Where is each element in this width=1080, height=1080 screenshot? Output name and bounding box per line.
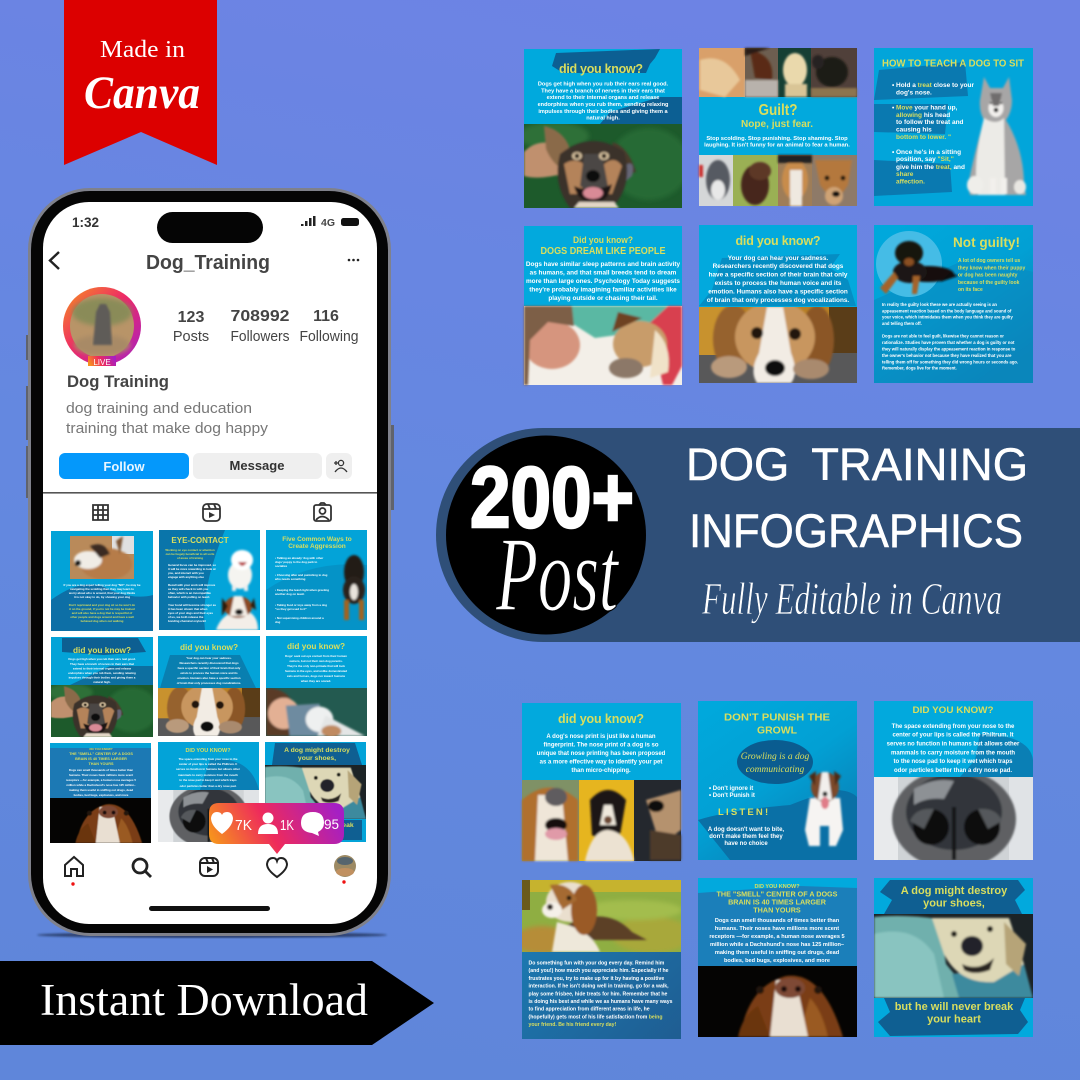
thumbnail: dog in box: and will also have a dog that is respectful of [72, 611, 132, 615]
thumbnail: sad beagle: of brain that only processes dog vocalizations. [177, 681, 241, 685]
body text: play some frisbee, hide treats for him. Remember that he [528, 991, 667, 997]
thumbnail: eye contact: Your bond will become stronger as [168, 603, 216, 607]
notification badge [209, 803, 344, 854]
body text: impulses through their bodies and giving them a [538, 109, 669, 115]
thumbnail: dog nose: DID YOU KNOW? [185, 748, 231, 754]
steps: to follow the treat and [896, 119, 964, 126]
thumbnail: dog ear rub: They have a branch of nerves in their ears that [70, 662, 134, 666]
thumbnail: woman and dog: Dogs' seek out eye contact from their human [285, 654, 347, 658]
thumbnail: eye contact: engage with anything else [168, 575, 204, 579]
callout blob [737, 740, 813, 784]
thumbnail: smell center: Dogs can smell thousands of times better than [69, 768, 133, 772]
thumbnail: sad beagle: emotion. Humans also have a specific section [177, 676, 241, 680]
body text: laughing. It isn't funny for an animal to fear a human. [704, 142, 850, 148]
body text: Do something fun with your dog every day. Remind him [528, 960, 665, 966]
subheading: Nope, just fear. [741, 119, 813, 130]
steps: dog's nose. [896, 89, 932, 96]
body text: In reality the guilty look these we are actually seeing is an [882, 302, 997, 307]
profile stats: 123 [178, 309, 204, 326]
photo: dog looking up [698, 966, 857, 1037]
title: INFOGRAPHICS [689, 504, 1023, 557]
heading: THAN YOURS [753, 906, 801, 914]
thumbnail: woman and dog [266, 636, 367, 737]
body text: to find appreciation from different areas in life, he [528, 1007, 650, 1013]
add friend button [326, 453, 352, 479]
heading: your shoes, [923, 898, 985, 910]
thumbnail: destroy shoes [265, 742, 366, 842]
notification badge: 95 [324, 816, 339, 832]
body text: Remember, dogs live for the moment. [882, 366, 957, 371]
thumbnail: eye contact: bonding chemical oxytocin! [168, 619, 206, 623]
thumbnail: eye contact: it has been shown that when [168, 607, 208, 611]
thumbnail: dog nose: to the nose pad to keep it wet which traps [179, 778, 237, 782]
thumbnail: eye contact: Recall with your work will improve [168, 583, 216, 587]
thumbnail: five common ways: dog [275, 620, 281, 624]
closing text: have no choice [724, 841, 768, 847]
body text [887, 724, 1020, 774]
heading: THE "SMELL" CENTER OF A DOGS [717, 890, 838, 898]
fourth row card: destroy your shoes [874, 878, 1033, 1037]
thumbnail: smell center: humans. Their noses have millions more scent [69, 773, 133, 777]
body text: frustrates you, try to make up for it by having a positive [528, 976, 664, 982]
photo: rottweiler on blue circle [876, 231, 958, 297]
icon: badge heart [211, 812, 233, 834]
body text: million while a Dachshund's nose has 125 million– [710, 942, 844, 948]
body text: bodies, bed bugs, explosives, and more [724, 958, 830, 964]
heading: did you know? [559, 62, 643, 76]
intro text: they know when their puppy [958, 266, 1025, 272]
fourth row card: smell center [698, 878, 857, 1037]
heading: Not guilty! [953, 235, 1020, 250]
profile stats: Posts [173, 329, 209, 345]
thumbnail: destroy shoes: but he will never break [280, 822, 354, 829]
heading: A dog might destroy [901, 885, 1008, 897]
follow button [59, 453, 189, 479]
icon: badge comment [301, 812, 324, 836]
steps: position, say "Sit," [896, 156, 954, 163]
avatar with live ring: LIVE [93, 358, 111, 367]
heading: BRAIN IS 40 TIMES LARGER [728, 898, 827, 906]
body text: and telling them off. [882, 321, 922, 326]
body text: appeasement reaction based on the body language and sound of [882, 308, 1012, 313]
profile stats: 116 [313, 308, 339, 325]
body text: humans. Their noses have millions more scent [715, 926, 839, 932]
heading [724, 712, 830, 736]
body text: as a more effective way to identify your pet [540, 760, 662, 766]
thumbnail: dog ear rub: natural high. [93, 680, 111, 684]
bullets [709, 786, 755, 799]
thumbnail: dog ear rub: endorphins when you rub them, sending relaxing [68, 671, 136, 675]
photo: sad beagle [699, 301, 857, 383]
status bar: 1:32 [72, 215, 99, 230]
thumbnail: dog ear rub [48, 637, 158, 737]
thumbnail: dog in box [51, 531, 153, 631]
photo: boy and dog sleeping [524, 306, 682, 385]
profile header: Dog_Training [146, 252, 270, 274]
body text: to the nose pad to keep it wet which traps [893, 759, 1013, 765]
thumbnail: dog nose: The space extending from your nose to the [178, 757, 238, 761]
body text: They have a branch of nerves in their ears that [541, 88, 665, 94]
second row card: dogs dream like people [524, 226, 682, 385]
body text: of brain that only processes dog vocalizations. [707, 297, 849, 304]
thumbnail: woman and dog: did you know? [287, 641, 345, 651]
thumbnail: five common ways: another dog on leash [275, 592, 304, 596]
thumbnail: eye contact [159, 530, 260, 630]
top row card: how to teach a dog to sit [874, 48, 1033, 206]
body text [537, 734, 666, 774]
ribbon text: Made in: Made in [100, 37, 185, 63]
photo: beagle in grass [514, 880, 692, 954]
body text: Dogs get high when you rub their ears real good. [538, 82, 669, 88]
body text [704, 136, 850, 148]
thumbnail: eye contact: can be hugely beneficial to all sorts [166, 552, 215, 556]
profile stats: Followers [230, 329, 290, 345]
bullets: • Don't ignore it [709, 786, 753, 792]
photos: three dogs [522, 780, 681, 861]
heading: GROWL [757, 724, 798, 736]
closing text: but he will never break [895, 1001, 1014, 1013]
body text: The space extending from your nose to the [892, 724, 1015, 730]
callout blob: communicating [746, 765, 805, 775]
thumbnail: woman and dog: cats and horses, dogs run toward humans [287, 674, 345, 678]
thumbnail: sad beagle: exists to process the human voice and its [180, 671, 238, 675]
thumbnail: five common ways: • Talking an already 'dog with other [275, 556, 324, 560]
home indicator [149, 906, 270, 911]
body text [709, 918, 845, 964]
third row card: philtrum [874, 701, 1033, 869]
body text: Dogs are not able to feel guilt, likewise they cannot reason or [882, 334, 1004, 339]
thumbnail: smell center: making them useful in sniffing out drugs, dead [69, 788, 133, 792]
thumbnail: dog nose: odor particles better than a dry nose pad. [180, 784, 237, 788]
thumbnail: eye contact: it will be more rewarding to look at [168, 567, 216, 571]
heading [540, 235, 666, 257]
callout blob: Growling is a dog [741, 752, 810, 762]
profile header [50, 252, 359, 274]
thumbnail: dog ear rub: did you know? [73, 645, 131, 655]
thumbnail: woman and dog: humans in the eyes, and unlike domesticated [285, 669, 347, 673]
body text [538, 82, 669, 122]
notification badge: 7K [235, 817, 252, 834]
thumbnail: dog in box: worry about who is around, that your dog thinks [68, 591, 136, 595]
thumbnail: smell center: DO YOU KNOW? [89, 747, 113, 751]
intro text: A lot of dog owners tell us [958, 258, 1021, 264]
body text: Dogs can smell thousands of times better than [715, 918, 840, 924]
thumbnail: sad beagle: have a specific section of their brain that only [178, 666, 241, 670]
listen: LISTEN! [718, 807, 770, 818]
steps: bottom to lower. " [896, 134, 951, 141]
thumbnail: smell center: BRAIN IS 40 TIMES LARGER [75, 757, 127, 761]
thumbnail: eye contact: often, which is an incompatible [168, 591, 211, 595]
profile bio [66, 401, 269, 437]
title [686, 439, 1028, 557]
phone frame [26, 188, 394, 936]
profile stats [173, 308, 358, 345]
body text: Dogs have similar sleep patterns and brain activity [526, 261, 681, 268]
phone mockup [26, 188, 394, 938]
phone shadow [37, 932, 387, 938]
thumbnail: eye contact: of areas of training [177, 556, 203, 560]
steps: • [892, 104, 895, 112]
photo strip: top dogs [699, 48, 857, 97]
body text: center of your lips is called the Philtrum. It [892, 733, 1014, 739]
black circle badge [446, 436, 646, 634]
banner [436, 428, 1080, 642]
thumbnail: sad beagle: Researchers recently discovered that dogs [179, 661, 239, 665]
second row card: hear your sadness [699, 225, 857, 383]
body text: as humans, and that small breeds tend to dream [530, 270, 677, 276]
profile name: Dog Training [67, 373, 169, 391]
tab divider [43, 492, 377, 494]
ribbon: Made in Canva [64, 0, 217, 165]
fourth row card: do something fun [514, 880, 692, 1039]
body text: they will naturally display the appeasement reaction in response to [882, 346, 1016, 351]
photo: husky [967, 77, 1026, 195]
body text: they're probably imagining familiar activities like [529, 286, 677, 294]
Instant Download arrow [0, 961, 434, 1045]
body text: telling them off for something they did wrong hours or seconds ago. [882, 359, 1018, 364]
thumbnail: dog in box: it on the ground, if you're not he may be trained [69, 607, 135, 611]
thumbnail: eye contact: General focus can be improved, so [168, 563, 216, 567]
thumbnail: five common ways: • Taking food or toys away from a dog [275, 603, 327, 607]
heading: HOW TO TEACH A DOG TO SIT [882, 58, 1024, 70]
profile stats: 708992 [230, 308, 290, 325]
status bar [72, 212, 359, 243]
thumbnail: dog ear rub: Dogs get high when you rub their ears real good. [68, 657, 136, 661]
follow button: Follow [103, 459, 145, 474]
photo: puppy on pillow [874, 914, 1033, 998]
bottom navigation [65, 855, 356, 886]
body text: exists to process the human voice and its [715, 280, 842, 287]
closing text: A dog doesn't want to bite, [708, 827, 784, 833]
thumbnail: dog nose: center of your lips is called the Philtrum. It [179, 762, 237, 766]
tab icons [93, 503, 331, 521]
thumbnail: dog in box: it is not okay to do, by showing your dog [74, 595, 130, 599]
thumbnail: dog ear rub: impulses through their bodies and giving them a [69, 676, 136, 680]
icon: profile avatar [334, 855, 356, 877]
body text: is doing his best and while we as humans have many ways [528, 999, 673, 1005]
thumbnail: five common ways [266, 530, 367, 630]
thumbnail: eye contact: behavior with pulling on leash [168, 595, 210, 599]
body text: Stop scolding. Stop punishing. Stop shaming. Stop [706, 136, 848, 142]
intro text: on its face [958, 287, 983, 293]
heading: DID YOU KNOW? [754, 884, 800, 890]
thumbnail: sad beagle: did you know? [180, 642, 238, 652]
title: DOG TRAINING [686, 439, 1028, 490]
thumbnail: dog nose: mammals to carry moisture from the mouth [178, 773, 238, 777]
body text: unique that nose printing has been proposed [537, 751, 666, 757]
thumbnail: eye contact: Working on eye contact or attention [165, 548, 215, 552]
body text: odor particles better than a dry nose pad. [894, 768, 1012, 774]
body text: (and you!) how much you appreciate him. Especially if he [528, 968, 669, 974]
thumbnail: destroy shoes: your shoes, [298, 755, 336, 762]
body text [707, 255, 849, 304]
closing text: your heart [927, 1014, 981, 1026]
body text: serves no function in humans but allows other [887, 741, 1020, 747]
heading: DOGS DREAM LIKE PEOPLE [540, 246, 666, 257]
body text: your voice, which intimidates them when you think they are guilty [882, 315, 1013, 320]
body text: than micro-chipping. [571, 768, 631, 774]
steps: Once he's in a sitting [896, 149, 961, 156]
body text: Researchers recently discovered that dogs [713, 263, 844, 270]
thumbnail: woman and dog: They're the only non-primate that will look [287, 664, 345, 668]
message button: Message [230, 458, 284, 473]
body text: emotion. Humans also have a specific section [708, 288, 848, 296]
profile bio: training that make dog happy [66, 421, 269, 437]
body text [526, 261, 681, 302]
message button [193, 453, 322, 479]
thumbnail: five common ways: • Choosing after and punishing to dog [275, 573, 328, 577]
icon: heart [267, 858, 287, 877]
body text: A dog's nose print is just like a human [546, 734, 656, 740]
thumbnail: five common ways: • Not supervising children around a [275, 616, 324, 620]
body text: Your dog can hear your sadness. [728, 255, 828, 262]
heading: Did you know? [573, 235, 633, 245]
body text: making them useful in sniffing out drugs, dead [715, 950, 840, 956]
thumbnail: smell center [50, 743, 151, 843]
icon: home [65, 857, 83, 876]
thumbnail: dog in box: Don't reprimand and your dog sit so he won't do [69, 603, 135, 607]
steps: Hold a treat close to your [896, 82, 974, 89]
avatar with live ring [63, 287, 141, 367]
icon: search [133, 859, 151, 877]
thumbnail: smell center: THAN YOURS [88, 762, 114, 766]
intro text: or dog has been naughty [958, 272, 1018, 278]
photo: dog with hand [519, 122, 689, 208]
200+: 200+ [470, 450, 634, 546]
icon: white dog [228, 550, 253, 591]
body text: (hopefully) gets most of his life satisfaction from being [528, 1014, 662, 1020]
thumbnail: five common ways: • Keeping the leash tight when greeting [275, 588, 329, 592]
third row card: nose print [522, 703, 681, 861]
body text [528, 960, 673, 1028]
thumbnail: smell center: receptors —for example, a human nose averages 5 [66, 778, 136, 782]
thumbnail: destroy shoes: A dog might destroy [284, 747, 350, 754]
ribbon text: Canva: Canva [84, 67, 200, 119]
body text: more than large ones. Psychology Today suggests [526, 278, 680, 285]
body text: extend to their internal organs and release [547, 95, 659, 101]
top row card: did you know ear rub [519, 49, 689, 208]
thumbnail: woman and dog: owners, but not their own dog parents. [289, 659, 343, 663]
thumbnail: five common ways: Create Aggression [288, 543, 346, 550]
icon: black and tan dog [343, 555, 365, 620]
profile bio: dog training and education [66, 401, 252, 417]
thumbnail: sad beagle: Your dog can hear your sadness. [186, 656, 232, 660]
steps: give him the treat, and [896, 164, 965, 171]
photo: jack russell [805, 771, 843, 846]
thumbnail: eye contact: eyes of your dogs and their eyes [168, 611, 213, 615]
body text [882, 302, 1018, 371]
body text: mammals to carry moisture from the mouth [891, 750, 1015, 756]
Post: Post [495, 516, 620, 633]
thumbnail: smell center: million while a Dachshund's nose has 125 million– [66, 783, 136, 787]
third row card: don't punish the growl [698, 701, 857, 860]
photo: nose closeup [874, 769, 1033, 869]
thumbnail: dog ear rub: extend to their internal organs and release [73, 666, 132, 670]
body text: interaction. If he isn't doing well in training, go for a walk, [528, 984, 669, 990]
thumbnail: dog in box: behaved dog when out walking [81, 619, 124, 623]
body text: the owner's behavior not because they have realized that you are [882, 353, 1012, 358]
thumbnail: eye contact: you, and interact with you [168, 571, 204, 575]
heading: DON'T PUNISH THE [724, 712, 830, 724]
thumbnail: dog in box: If you are a dog expert telling your dog "NO", he may be [64, 583, 141, 587]
heading: did you know? [558, 712, 644, 726]
body text: rationalize. Studies have proven that whether a dog is guilty or not [882, 340, 1015, 345]
steps: causing his [896, 126, 932, 134]
profile stats: Following [300, 329, 358, 345]
photo strip: bottom dogs [699, 155, 857, 206]
heading [901, 885, 1008, 910]
heading: Guilt?: Guilt? [758, 102, 798, 119]
status bar: 4G [321, 217, 335, 229]
thumbnail: dog in box: other people and dogs around and have a well [70, 615, 134, 619]
body text: fingerprint. The nose print of a dog is so [543, 742, 659, 748]
top row card: guilt [699, 48, 857, 206]
thumbnail: eye contact: EYE-CONTACT [171, 536, 229, 545]
closing text [895, 1001, 1014, 1026]
heading: did you know? [736, 234, 820, 248]
body text: natural high. [586, 116, 620, 122]
closing text [708, 827, 784, 847]
thumbnail: five common ways: dogs' puppy to the dog park to [275, 560, 318, 564]
thumbnail: dog nose: serves no function in humans but allows other [176, 767, 241, 771]
steps [892, 82, 974, 186]
thumbnail: five common ways: Five Common Ways to [282, 536, 352, 543]
body text: your friend. Be his friend every day! [528, 1022, 616, 1028]
steps: share [896, 171, 914, 178]
body text: endorphins when you rub them, sending relaxing [538, 102, 669, 108]
steps: affection. [896, 178, 925, 186]
thumbnail: woman and dog: when they are scared. [300, 679, 331, 683]
thumbnail: dog in box: navigating the scolding then they may learn to [70, 587, 134, 591]
body text: have a specific section of their brain that only [709, 272, 848, 278]
icon: brown dog [216, 596, 258, 630]
thumbnail: smell center: bodies, bed bugs, explosives, and more [74, 793, 129, 797]
thumbnail: eye contact: as they will check in with you [168, 587, 209, 591]
icon: reels [200, 858, 218, 876]
thumbnail: eye contact: of us, we both release the [168, 615, 204, 619]
second row card: not guilty [874, 225, 1033, 383]
thumbnail: sad beagle [158, 636, 260, 736]
body text: receptors —for example, a human nose averages 5 [709, 934, 845, 940]
steps: • [892, 149, 895, 156]
thumbnail: five common ways: "so they get used to it" [275, 607, 307, 611]
closing text: don't make them feel they [709, 834, 783, 840]
steps: • [892, 82, 895, 89]
Instant Download arrow: Instant Download [40, 975, 368, 1025]
bullets: • Don't Punish it [709, 793, 755, 799]
intro text: because of the guilty look [958, 280, 1020, 286]
heading: DID YOU KNOW? [912, 705, 994, 716]
thumbnail: five common ways: who needs something [274, 577, 306, 581]
heading [717, 884, 838, 914]
body text: playing outside or chasing their tail. [548, 295, 658, 302]
thumbnail: smell center: THE "SMELL" CENTER OF A DOGS [69, 752, 133, 756]
thumbnail: five common ways: socialize [275, 564, 287, 568]
thumbnail: dog nose [158, 742, 259, 848]
post grid [48, 530, 367, 848]
icon: badge person [258, 812, 278, 834]
intro text [958, 258, 1025, 293]
steps: Move your hand up, [896, 104, 958, 112]
notification badge: 1K [280, 817, 294, 834]
steps: allowing his head [896, 112, 950, 119]
